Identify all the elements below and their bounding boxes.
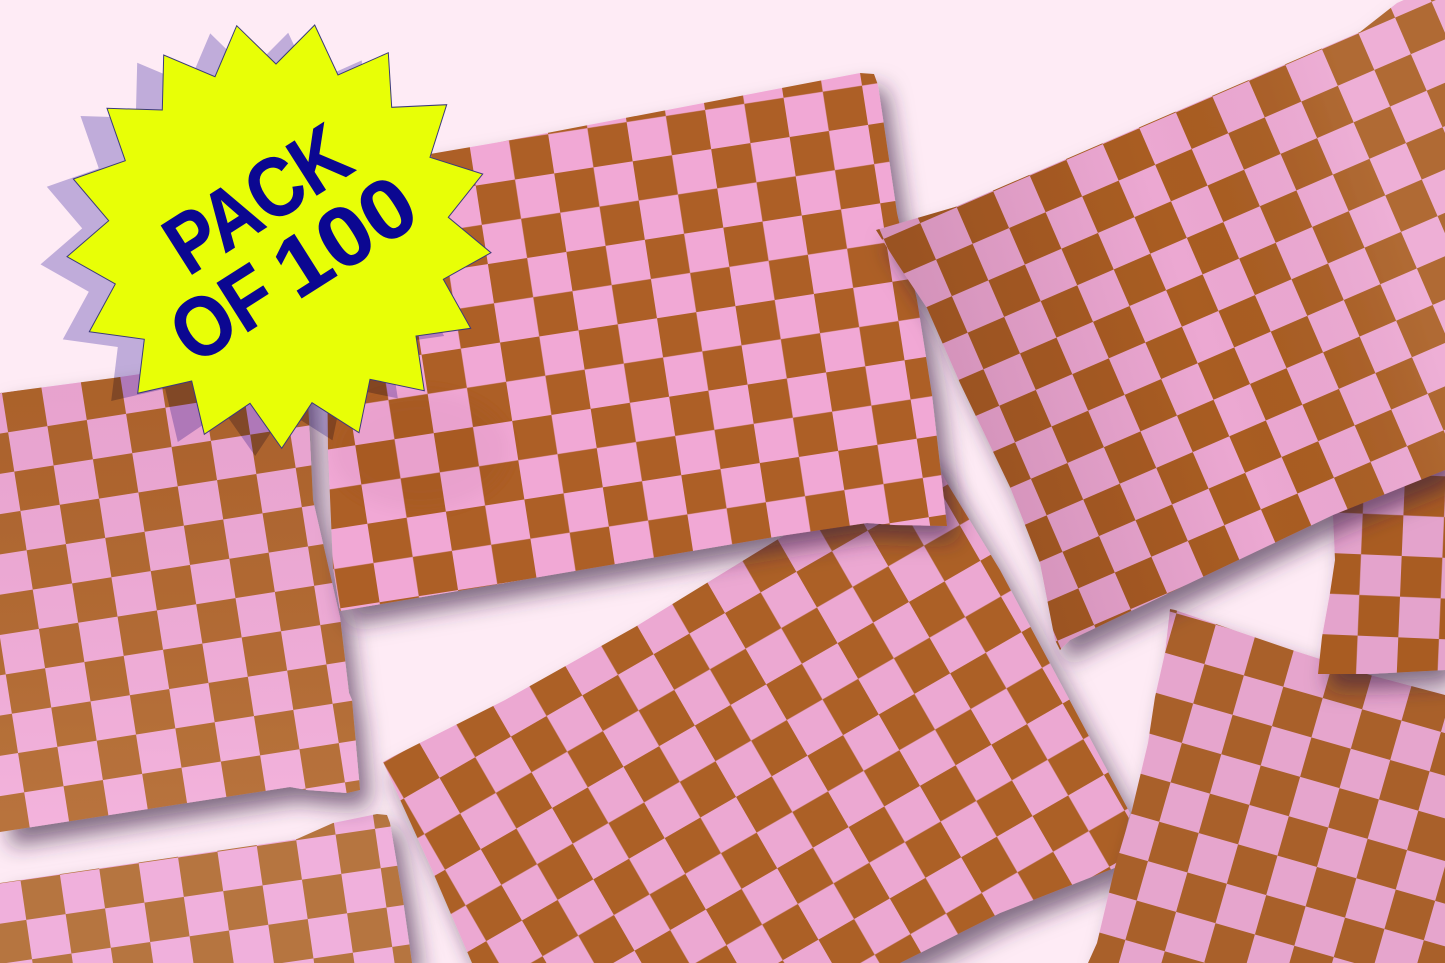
badge: pack of 100 starburst [40, 25, 491, 456]
badge star [67, 25, 491, 448]
mailer: top right [876, 0, 1445, 650]
mailer: top center [325, 73, 947, 611]
mailer: left [0, 350, 360, 832]
badge text: PACK: PACK [147, 106, 367, 292]
badge shadow [40, 33, 464, 456]
mailer: bottom right [1088, 609, 1445, 963]
mailer: bottom left [0, 814, 412, 963]
badge text: OF: OF [153, 246, 292, 381]
mailer: small right [1318, 440, 1445, 674]
mailer: bottom center [383, 452, 1130, 963]
badge text: 100: 100 [256, 156, 433, 316]
